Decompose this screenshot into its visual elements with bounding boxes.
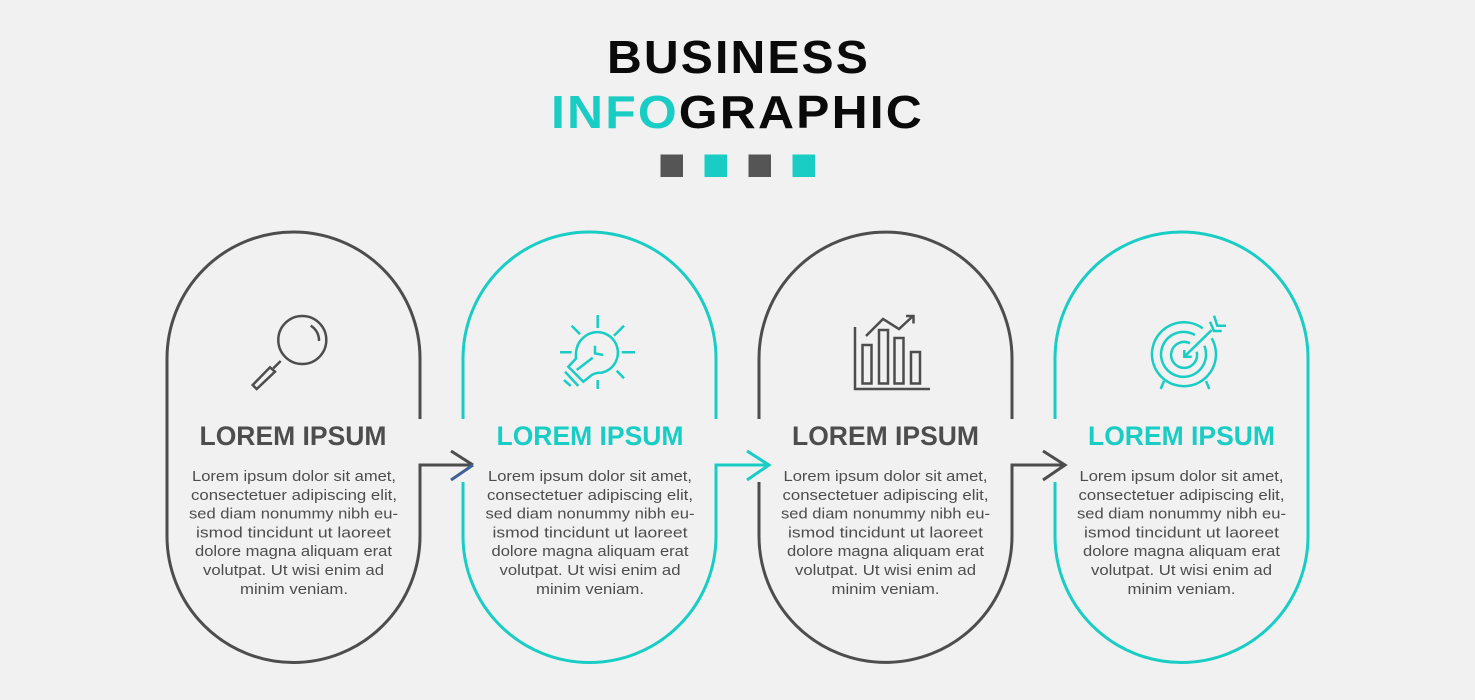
title bbox=[551, 31, 924, 138]
text: step 3: volutpat. Ut wisi enim ad bbox=[795, 563, 976, 579]
text: step 3: consectetuer adipiscing elit, bbox=[782, 488, 988, 504]
title: BUSINESS bbox=[607, 31, 870, 83]
text: step 2: sed diam nonummy nibh eu- bbox=[486, 507, 695, 523]
heading: step 2: LOREM IPSUM bbox=[496, 421, 684, 451]
text: step 4: sed diam nonummy nibh eu- bbox=[1077, 507, 1286, 523]
text: step 1: dolore magna aliquam erat bbox=[195, 544, 392, 560]
text: step 4: dolore magna aliquam erat bbox=[1083, 544, 1280, 560]
text: step 4: ismod tincidunt ut laoreet bbox=[1084, 525, 1279, 541]
step 4 outline bbox=[1055, 232, 1308, 663]
step 3 outline and arrow bbox=[759, 232, 1065, 662]
icon: bar chart bbox=[855, 316, 930, 389]
text: step 2: dolore magna aliquam erat bbox=[492, 544, 688, 560]
text: step 1: Lorem ipsum dolor sit amet, bbox=[192, 469, 396, 485]
text: step 3: sed diam nonummy nibh eu- bbox=[781, 507, 990, 523]
step 2 outline and arrow bbox=[463, 232, 769, 663]
text: step 4 bbox=[1077, 469, 1286, 598]
text: step 1: minim veniam. bbox=[240, 582, 348, 598]
text: step 4: Lorem ipsum dolor sit amet, bbox=[1080, 469, 1284, 485]
text: step 2: minim veniam. bbox=[536, 582, 644, 598]
text: step 2: volutpat. Ut wisi enim ad bbox=[500, 563, 680, 579]
text: step 1 bbox=[189, 469, 398, 598]
icon: light bulb bbox=[560, 315, 635, 389]
heading: step 1: LOREM IPSUM bbox=[200, 421, 386, 451]
text: step 1: volutpat. Ut wisi enim ad bbox=[203, 563, 384, 579]
text: step 1: sed diam nonummy nibh eu- bbox=[189, 507, 398, 523]
text: step 1: consectetuer adipiscing elit, bbox=[191, 488, 397, 504]
text: step 4: minim veniam. bbox=[1128, 582, 1236, 598]
panel: step 3 bbox=[759, 232, 1065, 662]
icon: magnifying glass bbox=[253, 316, 326, 389]
text: step 3: ismod tincidunt ut laoreet bbox=[788, 525, 983, 541]
text: step 3 bbox=[781, 469, 990, 598]
text: step 4: consectetuer adipiscing elit, bbox=[1078, 488, 1284, 504]
text: step 2: Lorem ipsum dolor sit amet, bbox=[488, 469, 692, 485]
icon: target with arrow bbox=[1152, 316, 1226, 389]
heading: step 3: LOREM IPSUM bbox=[792, 421, 979, 451]
panel: step 4 bbox=[1055, 232, 1308, 663]
text: step 2 bbox=[486, 469, 695, 598]
text: step 2: consectetuer adipiscing elit, bbox=[487, 488, 693, 504]
title squares bbox=[660, 154, 815, 177]
heading: step 4: LOREM IPSUM bbox=[1088, 421, 1275, 451]
text: step 4: volutpat. Ut wisi enim ad bbox=[1091, 563, 1272, 579]
text: step 3: Lorem ipsum dolor sit amet, bbox=[784, 469, 988, 485]
title: INFOGRAPHIC bbox=[551, 86, 924, 138]
panel: step 1 bbox=[167, 232, 473, 663]
text: step 3: minim veniam. bbox=[832, 582, 940, 598]
step 1 outline and arrow bbox=[167, 232, 473, 663]
text: step 2: ismod tincidunt ut laoreet bbox=[492, 525, 688, 541]
text: step 1: ismod tincidunt ut laoreet bbox=[196, 525, 391, 541]
text: step 3: dolore magna aliquam erat bbox=[787, 544, 984, 560]
panel: step 2 bbox=[463, 232, 769, 663]
